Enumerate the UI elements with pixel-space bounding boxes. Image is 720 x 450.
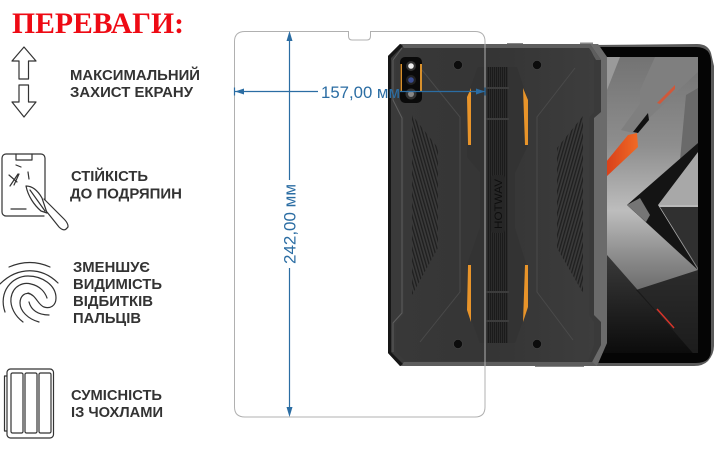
icon: fingerprint <box>0 262 58 322</box>
benefit: maximum protection <box>12 47 200 117</box>
camera module <box>400 57 422 103</box>
left edge <box>388 44 403 366</box>
text: compatible with cases: ІЗ ЧОХЛАМИ <box>71 405 163 421</box>
body panel <box>396 48 594 361</box>
height label: 242,00 мм <box>282 184 300 264</box>
orange accents <box>467 88 528 322</box>
benefit: fewer fingerprints <box>0 260 162 327</box>
right bumper <box>590 44 607 366</box>
center vent grille <box>486 67 509 343</box>
text: reduces fingerprint visibility: ПАЛЬЦІВ <box>73 311 141 327</box>
buttons <box>507 42 593 367</box>
tablet: front with screen <box>590 44 714 366</box>
height arrowheads <box>286 31 292 417</box>
tablet: rugged back <box>388 42 607 367</box>
text: reduces fingerprint visibility: ВИДИМІСТЬ <box>73 277 162 293</box>
right vent <box>557 116 583 293</box>
text: scratch resistance: ДО ПОДРЯПИН <box>70 186 182 202</box>
dimension: height <box>282 31 300 417</box>
text: reduces fingerprint visibility: ЗМЕНШУЄ <box>73 260 150 276</box>
icon: tablet case <box>4 369 54 438</box>
benefit: case compatibility <box>4 369 163 438</box>
width arrowheads <box>235 88 485 94</box>
text: compatible with cases <box>71 388 163 421</box>
left bumper outline <box>393 48 402 352</box>
text: reduces fingerprint visibility <box>73 260 162 327</box>
text: maximum screen protection: ЗАХИСТ ЕКРАНУ <box>70 85 194 101</box>
title: ПЕРЕВАГИ: <box>12 7 184 40</box>
bezel <box>590 47 711 363</box>
text: maximum screen protection <box>70 66 200 101</box>
screws <box>454 60 542 348</box>
text: reduces fingerprint visibility: ВІДБИТКІВ <box>73 294 153 310</box>
brand plate: HOTWAV <box>493 178 505 229</box>
top and bottom edges <box>400 44 601 366</box>
text: scratch resistance <box>70 167 182 202</box>
protective glass outline <box>234 32 485 417</box>
text: compatible with cases: СУМІСНІСТЬ <box>71 388 162 404</box>
center spine <box>467 67 528 343</box>
width label: 157,00 мм <box>321 84 400 102</box>
benefit: scratch resistance <box>2 154 182 230</box>
front frame <box>590 44 714 366</box>
icon: up and down arrows <box>12 47 36 117</box>
text: maximum screen protection: МАКСИМАЛЬНИЙ <box>70 66 200 84</box>
left vent <box>412 115 438 295</box>
brand plate <box>491 175 505 233</box>
height line <box>288 36 290 412</box>
icon: scratched screen and knife <box>2 154 68 230</box>
screen wallpaper <box>600 57 698 353</box>
panel contour lines <box>420 68 575 342</box>
width line <box>234 88 485 96</box>
text: scratch resistance: СТІЙКІСТЬ <box>71 167 148 185</box>
dimension: width <box>234 84 485 102</box>
back shell <box>388 44 607 366</box>
